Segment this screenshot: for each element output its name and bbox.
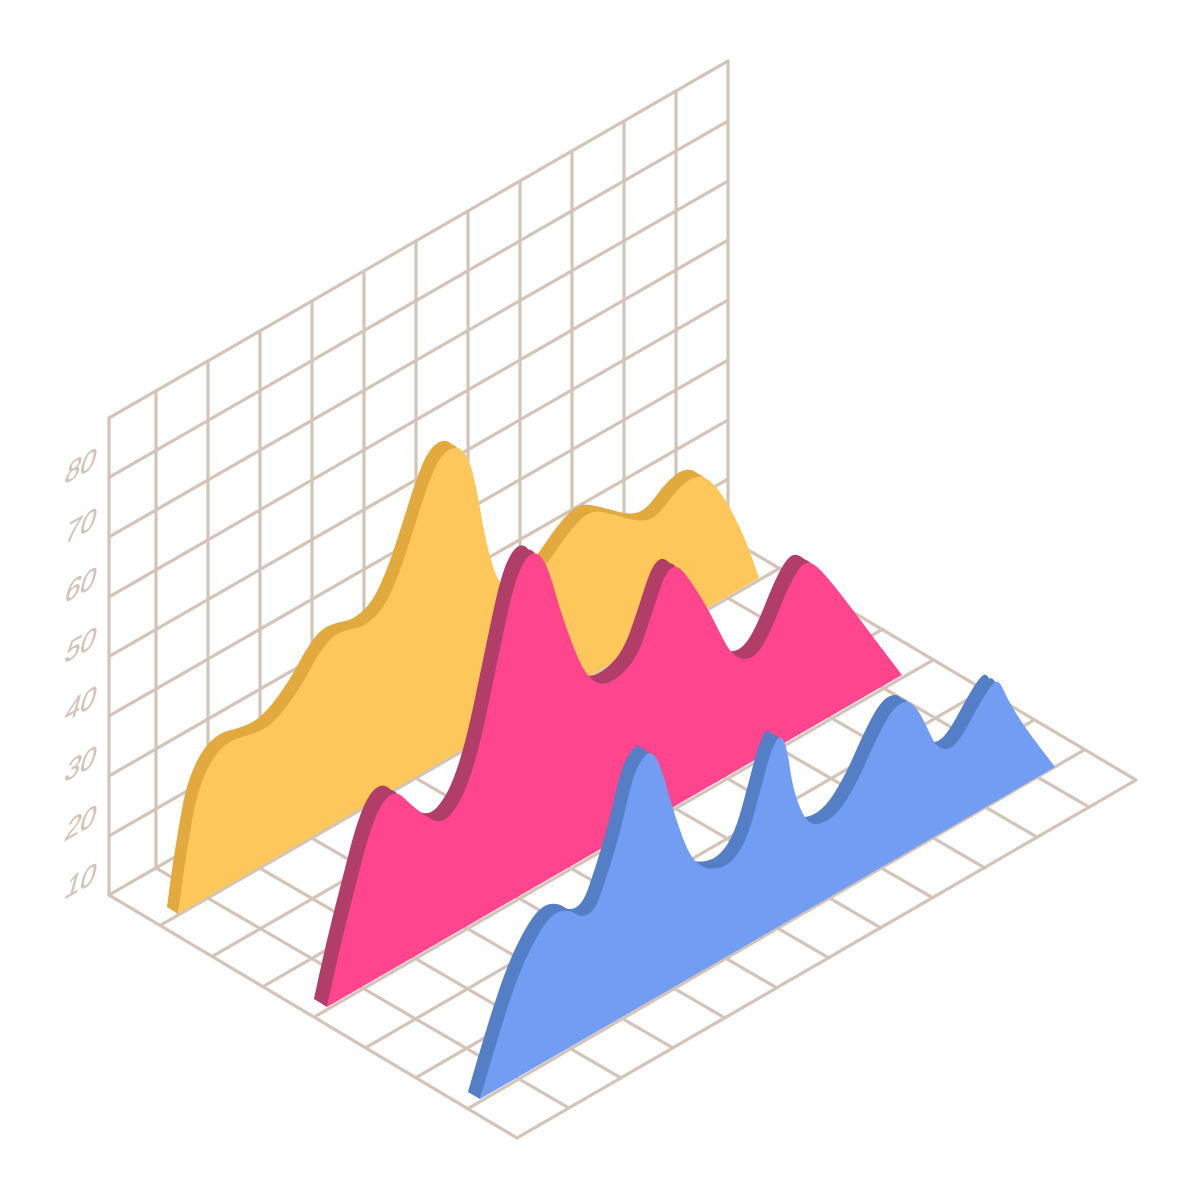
yellow area series [167, 441, 759, 914]
blue area series [468, 675, 1055, 1099]
label 20: 20 [61, 796, 101, 849]
wall grid [109, 61, 728, 895]
label 60: 60 [61, 558, 101, 611]
label 40: 40 [61, 677, 101, 730]
axis labels [61, 439, 101, 907]
pink area series [314, 545, 902, 1007]
label 80: 80 [61, 439, 101, 492]
label 10: 10 [61, 854, 101, 907]
floor grid [109, 538, 1136, 1138]
label 30: 30 [61, 737, 101, 790]
label 70: 70 [61, 499, 101, 552]
label 50: 50 [61, 618, 101, 671]
